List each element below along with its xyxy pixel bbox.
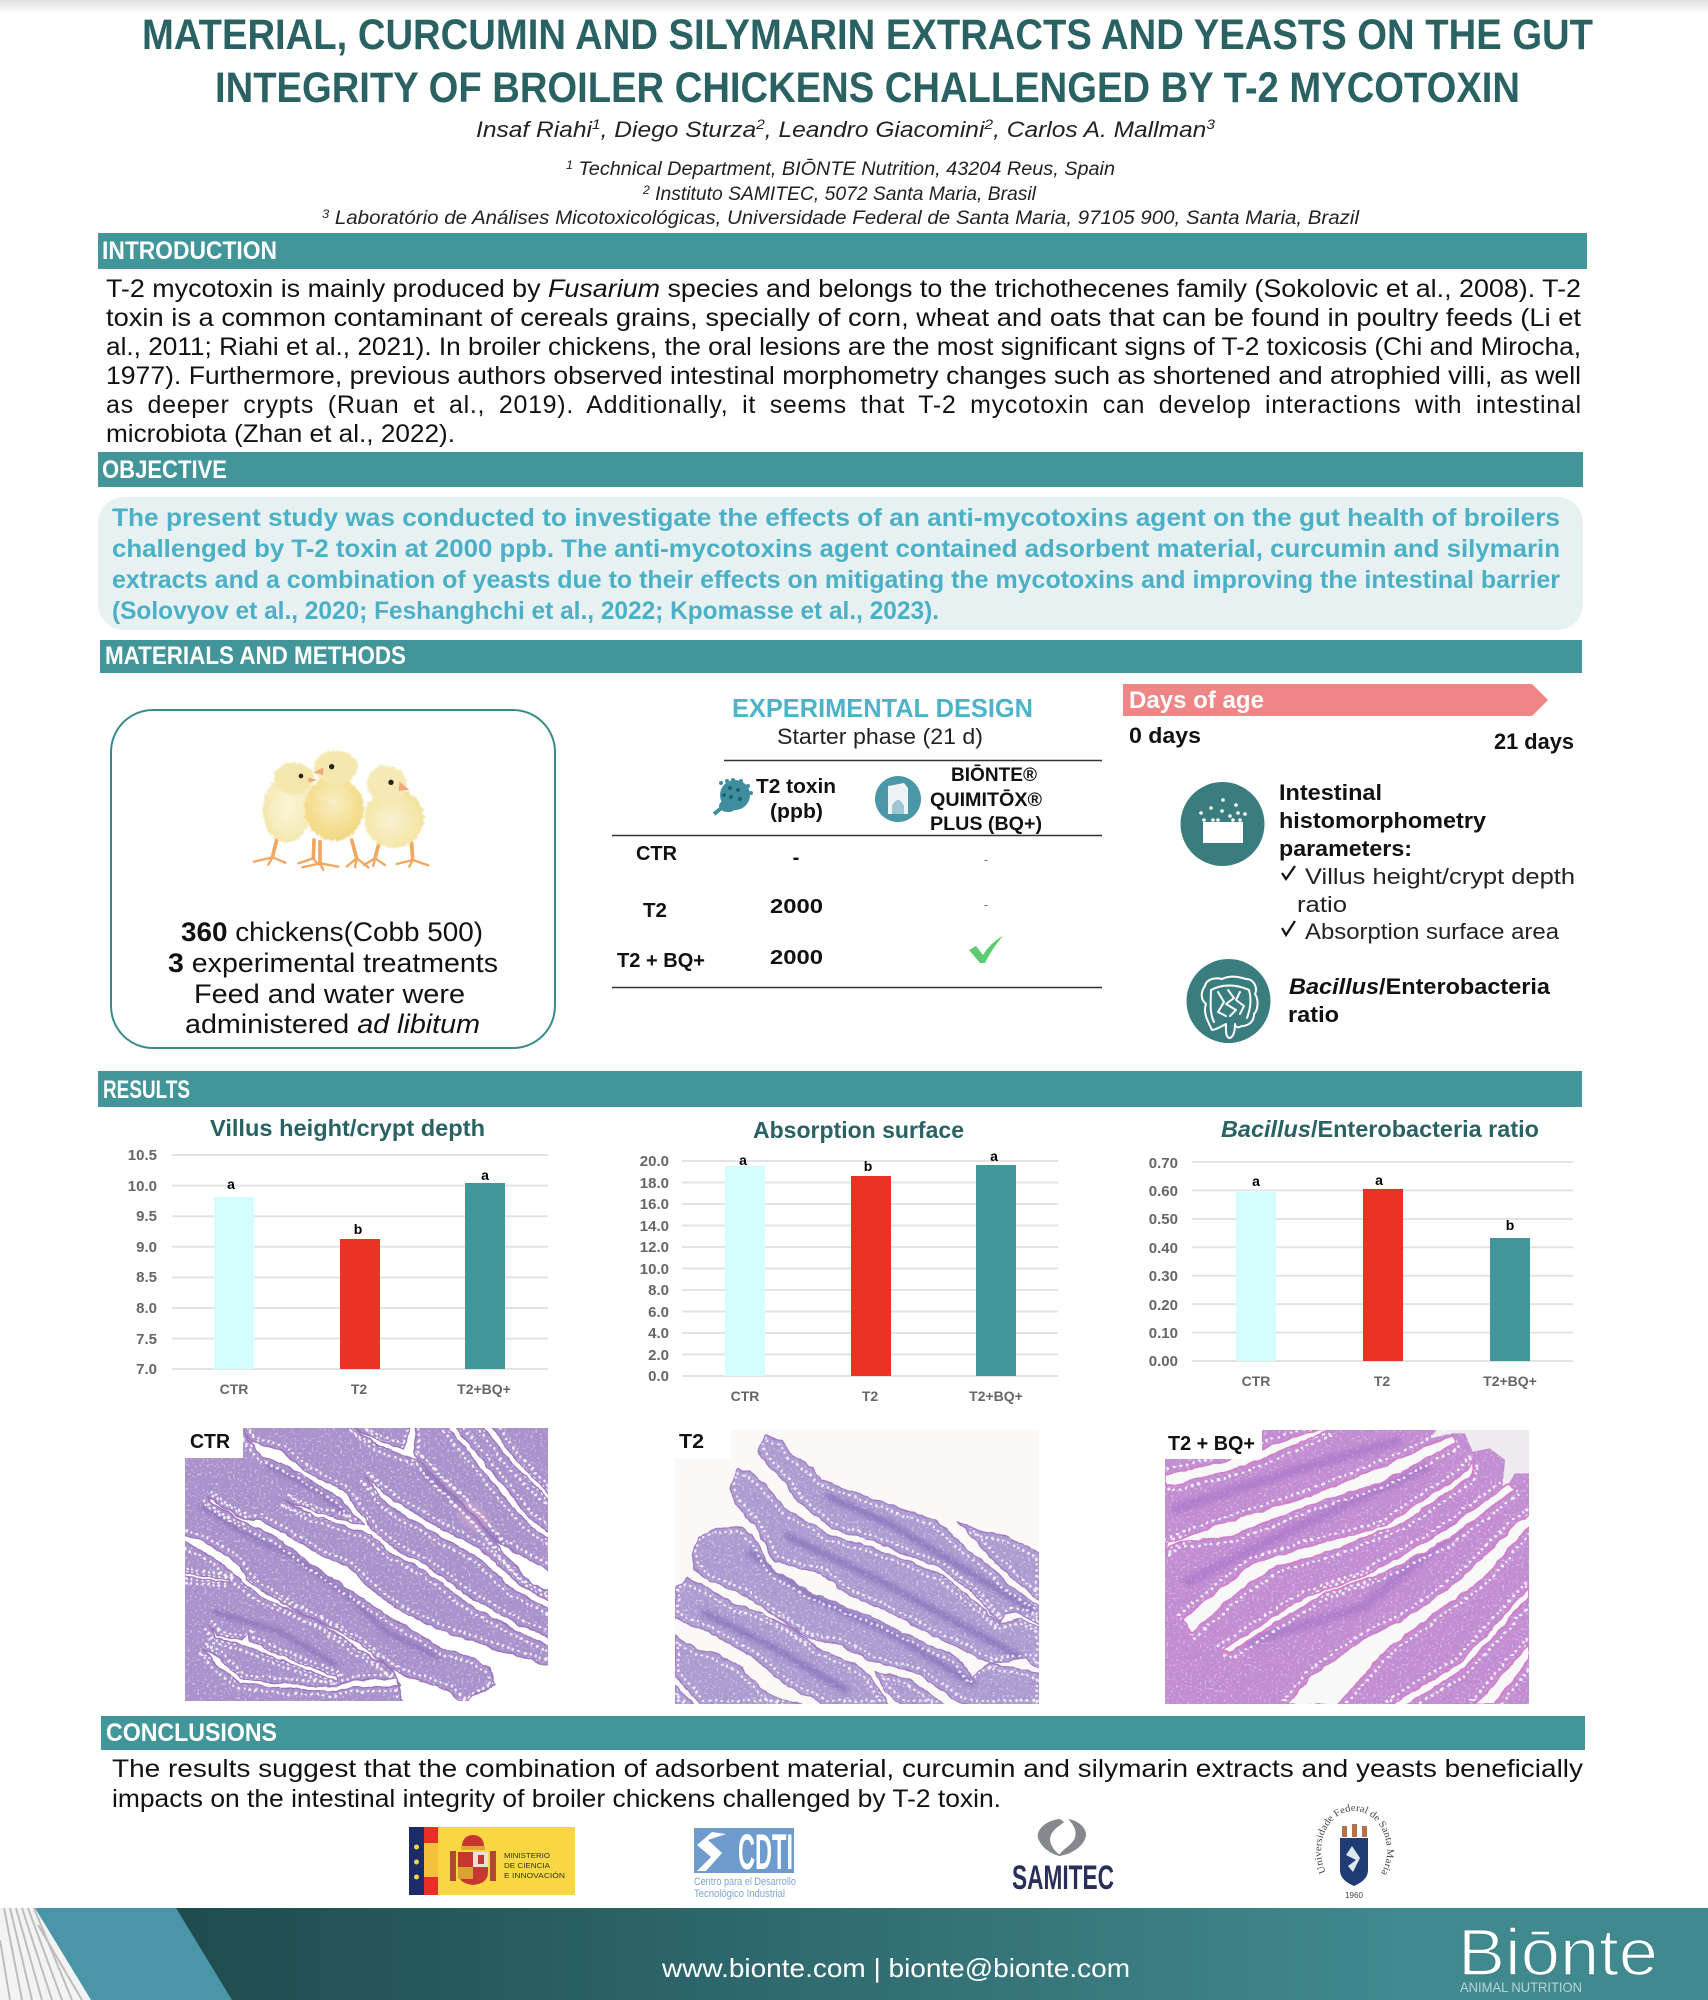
bar chart: villus height/crypt depth: Villus height/crypt depth: [210, 1115, 485, 1141]
heading: objective: OBJECTIVE: [102, 456, 227, 484]
bar chart: Bacillus/Enterobacteria ratio: [1149, 1116, 1573, 1389]
bar chart: villus height/crypt depth: 8.5: [136, 1269, 157, 1286]
bar chart: Bacillus/Enterobacteria ratio: T2+BQ+: [1483, 1373, 1537, 1389]
heading: objective: [98, 452, 1583, 487]
text block: introduction: T-2 mycotoxin is mainly produced by Fusarium species and belongs to the trichothecenes family (Sokolovic et al., 2008). T-2: [106, 275, 1581, 303]
heading: introduction: INTRODUCTION: [102, 237, 277, 265]
logo: Ministerio de Ciencia e Innovación: E INNOVACIÓN: [504, 1871, 565, 1880]
affiliations: 3: [322, 207, 330, 221]
image label: T2: [675, 1430, 731, 1458]
panel: conclusions: [101, 1716, 1585, 1813]
bar chart: absorption surface: 16.0: [640, 1196, 669, 1213]
bar chart: Bacillus/Enterobacteria ratio: 0.10: [1149, 1325, 1178, 1342]
text block: introduction: 1977). Furthermore, previous authors observed intestinal morphometry changes such as shortened and atrophied villi, as well: [106, 362, 1581, 390]
bar chart: absorption surface: 18.0: [640, 1175, 669, 1192]
table row: T2 + BQ+: T2 + BQ+: [617, 950, 705, 972]
arrow: days of age: [1123, 684, 1548, 716]
panel: materials and methods: [100, 640, 1582, 1048]
label: 0 days: 0 days: [1129, 723, 1201, 748]
text block: histomorphometry parameters: ratio: [1297, 892, 1347, 917]
logo: CDTI: Tecnológico Industrial: [694, 1888, 785, 1900]
title: INTEGRITY OF BROILER CHICKENS CHALLENGED BY T-2 MYCOTOXIN: [215, 64, 1520, 112]
column header: product: [930, 765, 1042, 835]
panel: introduction: [98, 233, 1587, 448]
heading: conclusions: [101, 1716, 1585, 1750]
icon: T-2 toxin mould: [714, 778, 753, 814]
bar chart: absorption surface: 2.0: [648, 1347, 669, 1364]
text block: introduction: [106, 275, 1581, 448]
bar chart: absorption surface: a: [739, 1152, 747, 1168]
bar chart: Bacillus/Enterobacteria ratio: T2: [1374, 1373, 1390, 1389]
table row: T2: 2000: [770, 896, 823, 918]
bar chart: Bacillus/Enterobacteria ratio: 0.20: [1149, 1297, 1178, 1314]
bar chart: villus height/crypt depth: T2+BQ+: [457, 1381, 511, 1397]
icon: product bag: [875, 776, 921, 822]
icon: histomorphometry: [1180, 782, 1264, 866]
decorative stripes and blue band: [0, 1908, 232, 2000]
title: [142, 11, 1593, 112]
panel: chickens: [111, 710, 555, 1048]
table row: T2: [643, 896, 988, 922]
panel: objective: [98, 452, 1583, 630]
histology image: T2 + BQ+: [1161, 1425, 1533, 1710]
text block: chicken details: 360 chickens(Cobb 500): [181, 917, 483, 947]
affiliations: 1: [566, 158, 573, 172]
bar chart: villus height/crypt depth: 9.5: [136, 1208, 157, 1225]
authors: Insaf Riahi: [476, 117, 580, 142]
text block: histomorphometry parameters: Villus height/crypt depth: [1305, 864, 1575, 889]
bar chart: absorption surface: 8.0: [648, 1282, 669, 1299]
bar chart: absorption surface: b: [864, 1158, 872, 1174]
logo: SAMITEC: SAMITEC: [1012, 1859, 1114, 1897]
affiliations: [322, 158, 1360, 229]
icon: green check: [969, 936, 1003, 963]
logo: Universidade Federal de Santa Maria: Universidade Federal de Santa Maria: [1315, 1804, 1394, 1874]
heading: introduction: [98, 233, 1587, 269]
table row: CTR: CTR: [636, 843, 678, 865]
bar chart: villus height/crypt depth: a: [227, 1176, 235, 1192]
text block: histomorphometry parameters: Intestinal: [1279, 780, 1382, 805]
logo: Ministerio de Ciencia e Innovación: MINISTERIO: [504, 1851, 550, 1860]
column header: T2 toxin: [756, 776, 836, 823]
text block: chicken details: 3 experimental treatments: [168, 948, 498, 978]
bar chart: Bacillus/Enterobacteria ratio: b: [1506, 1217, 1514, 1233]
text block: introduction: microbiota (Zhan et al., 2022).: [106, 420, 455, 448]
authors: 3: [1206, 116, 1215, 132]
bar chart: absorption surface: 12.0: [640, 1239, 669, 1256]
text block: Bacillus ratio: [1288, 974, 1551, 1027]
bar chart: villus height/crypt depth: [128, 1115, 548, 1397]
logo: Universidade Federal de Santa Maria: 1960: [1345, 1891, 1363, 1900]
bar chart: absorption surface: 0.0: [648, 1368, 669, 1385]
text block: chicken details: Feed and water were: [194, 979, 465, 1009]
panel: experimental design: [612, 693, 1102, 988]
text block: histomorphometry parameters: histomorphometry: [1279, 808, 1487, 833]
bar chart: absorption surface: 6.0: [648, 1304, 669, 1321]
image label: T2 + BQ+: [1165, 1430, 1262, 1459]
bar chart: Bacillus/Enterobacteria ratio: a: [1375, 1172, 1383, 1188]
logo: Ministerio de Ciencia e Innovación: DE CIENCIA: [504, 1861, 550, 1870]
poster canvas: CDTI: [738, 1824, 793, 1880]
bar chart: Bacillus/Enterobacteria ratio: 0.50: [1149, 1211, 1178, 1228]
column header: T2 toxin: (ppb): [770, 801, 823, 823]
authors: , Carlos A. Mallman: [993, 117, 1206, 142]
logo: Ministerio de Ciencia e Innovación: [409, 1827, 575, 1895]
bar chart: Bacillus/Enterobacteria ratio: 0.70: [1149, 1155, 1178, 1172]
affiliations: Technical Department, BIŌNTE Nutrition, 43204 Reus, Spain: [573, 159, 1115, 180]
text block: conclusions: The results suggest that the combination of adsorbent material, curcumin and silymarin extracts and yeasts beneficially: [112, 1755, 1584, 1783]
text block: Bacillus ratio: Bacillus /Enterobacteria: [1289, 974, 1551, 999]
bar chart: villus height/crypt depth: 8.0: [136, 1300, 157, 1317]
footer contact line: www.bionte.com | bionte@bionte.com: [661, 1953, 1130, 1983]
column header: product: BIŌNTE®: [951, 765, 1037, 786]
affiliations: Laboratório de Análises Micotoxicológicas, Universidade Federal de Santa Maria, 97105 900, Santa Maria, Brazil: [329, 208, 1360, 229]
authors: 2: [983, 116, 993, 132]
bar chart: absorption surface: 14.0: [640, 1218, 669, 1235]
image label: T2: T2: [679, 1431, 704, 1453]
footer: [0, 1908, 1708, 2000]
heading: results: RESULTS: [103, 1076, 190, 1104]
heading: conclusions: CONCLUSIONS: [106, 1719, 277, 1747]
table row: T2: -: [984, 897, 988, 912]
text block: introduction: al., 2011; Riahi et al., 2021). In broiler chickens, the oral lesions are the most significant signs of T-2 toxicosis (Chi and Mirocha,: [106, 333, 1581, 361]
callout: objective text: (Solovyov et al., 2020; Feshanghchi et al., 2022; Kpomasse et al., 2023).: [112, 597, 939, 625]
panel: timeline and parameters: [1123, 684, 1575, 1043]
column header: product: QUIMITŌX®: [930, 790, 1042, 811]
icon: three chicks: [254, 751, 428, 870]
bar chart: villus height/crypt depth: b: [354, 1221, 362, 1237]
text block: introduction: toxin is a common contaminant of cereals grains, specially of corn, wheat and oats that can be found in poultry feeds (Li et: [106, 304, 1581, 332]
table row: CTR: [636, 843, 988, 869]
callout: objective text: The present study was conducted to investigate the effects of an anti-mycotoxins agent on the gut health of broilers: [112, 504, 1560, 532]
image label: CTR: [185, 1428, 243, 1458]
heading: materials and methods: [100, 640, 1582, 673]
table row: CTR: -: [984, 852, 988, 867]
table row: T2 + BQ+: [617, 936, 1003, 972]
text block: histomorphometry parameters: parameters:: [1279, 836, 1412, 861]
text block: conclusions: impacts on the intestinal integrity of broiler chickens challenged by T-2 toxin.: [112, 1785, 1001, 1813]
histology image: T2: [672, 1425, 1045, 1710]
bar chart: villus height/crypt depth: CTR: [220, 1381, 248, 1397]
logo: Bionte: ANIMAL NUTRITION: [1460, 1979, 1582, 1995]
affiliations: 2: [642, 183, 650, 197]
logo: CDTI: [694, 1824, 796, 1900]
heading: materials and methods: MATERIALS AND METHODS: [105, 642, 406, 670]
authors: 1: [592, 116, 601, 132]
column header: T2 toxin: T2 toxin: [756, 776, 836, 798]
affiliations: Instituto SAMITEC, 5072 Santa Maria, Brasil: [650, 184, 1037, 205]
bar chart: absorption surface: T2+BQ+: [969, 1388, 1023, 1404]
bar chart: villus height/crypt depth: 7.5: [136, 1331, 157, 1348]
text block: chicken details: administered ad libitum: [185, 1009, 480, 1039]
bar chart: absorption surface: a: [990, 1148, 998, 1164]
histology image: CTR: [180, 1422, 553, 1708]
icon: intestine: [1186, 959, 1270, 1043]
callout: objective text: challenged by T-2 toxin at 2000 ppb. The anti-mycotoxins agent contained adsorbent material, curcumin and silymarin: [112, 535, 1560, 563]
bar chart: Bacillus/Enterobacteria ratio: a: [1252, 1173, 1260, 1189]
label: 21 days: 21 days: [1494, 729, 1574, 754]
logo: Bionte: Biōnte: [1458, 1915, 1658, 1989]
bar chart: Bacillus/Enterobacteria ratio: CTR: [1242, 1373, 1270, 1389]
bar chart: absorption surface: CTR: [731, 1388, 759, 1404]
bar chart: absorption surface: [640, 1117, 1058, 1404]
text block: chicken details: [168, 917, 498, 1039]
bar chart: villus height/crypt depth: 10.5: [128, 1147, 157, 1164]
bar chart: Bacillus/Enterobacteria ratio: 0.00: [1149, 1353, 1178, 1370]
bar chart: villus height/crypt depth: T2: [351, 1381, 367, 1397]
table row: T2 + BQ+: 2000: [770, 947, 823, 969]
bar chart: Bacillus/Enterobacteria ratio: 0.40: [1149, 1240, 1178, 1257]
heading: results: [98, 1071, 1582, 1107]
image label: T2 + BQ+: T2 + BQ+: [1168, 1433, 1255, 1455]
bar chart: absorption surface: Absorption surface: [753, 1117, 964, 1143]
column header: product: PLUS (BQ+): [930, 814, 1042, 835]
bar chart: villus height/crypt depth: 10.0: [128, 1178, 157, 1195]
bar chart: absorption surface: 10.0: [640, 1261, 669, 1278]
heading: experimental design: EXPERIMENTAL DESIGN: [732, 693, 1033, 723]
text block: Bacillus ratio: ratio: [1288, 1002, 1339, 1027]
bar chart: villus height/crypt depth: a: [481, 1167, 489, 1183]
authors: , Diego Sturza: [601, 117, 756, 142]
bar chart: absorption surface: 4.0: [648, 1325, 669, 1342]
subheading: starter phase: Starter phase (21 d): [777, 724, 983, 749]
callout: objective text: [98, 497, 1583, 630]
authors: 2: [755, 116, 765, 132]
image label: CTR: CTR: [190, 1431, 231, 1453]
logo: SAMITEC: [1012, 1819, 1114, 1897]
bar chart: villus height/crypt depth: 9.0: [136, 1239, 157, 1256]
text block: introduction: as deeper crypts (Ruan et al., 2019). Additionally, it seems that T-2 mycotoxin can develop interactions with intestinal: [106, 391, 1581, 419]
text block: histomorphometry parameters: Absorption surface area: [1305, 919, 1560, 944]
callout: objective text: extracts and a combination of yeasts due to their effects on mitigating the mycotoxins and improving the intestinal barrier: [112, 566, 1560, 594]
authors: , Leandro Giacomini: [765, 117, 986, 142]
panel: results: [98, 1071, 1582, 1710]
table row: T2: T2: [643, 900, 667, 922]
bar chart: absorption surface: T2: [862, 1388, 878, 1404]
bar chart: villus height/crypt depth: 7.0: [136, 1361, 157, 1378]
arrow: days of age: Days of age: [1129, 687, 1264, 714]
table row: CTR: -: [793, 847, 799, 869]
bar chart: Bacillus/Enterobacteria ratio: Bacillus/Enterobacteria ratio: [1221, 1116, 1539, 1142]
text block: histomorphometry parameters: [1279, 780, 1575, 944]
text block: conclusions: [112, 1755, 1584, 1813]
bar chart: absorption surface: 20.0: [640, 1153, 669, 1170]
bar chart: Bacillus/Enterobacteria ratio: 0.30: [1149, 1268, 1178, 1285]
bar chart: Bacillus/Enterobacteria ratio: 0.60: [1149, 1183, 1178, 1200]
logo: CDTI: Centro para el Desarrollo: [694, 1876, 796, 1888]
